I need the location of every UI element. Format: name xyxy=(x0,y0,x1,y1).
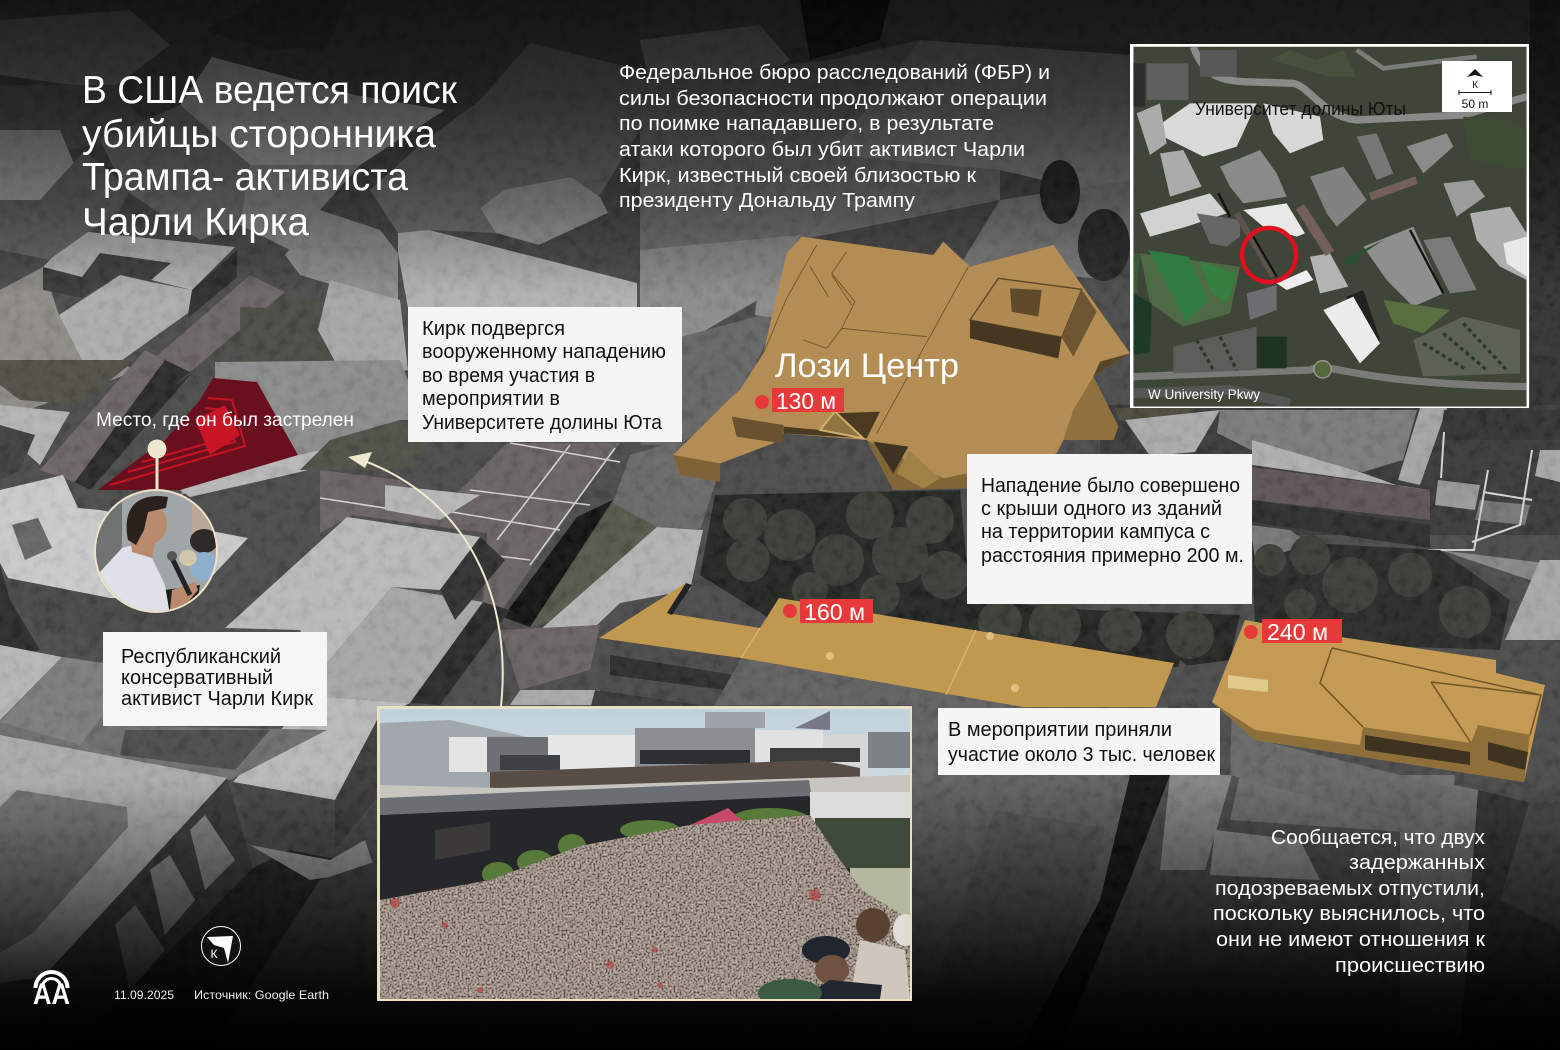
bottom shading xyxy=(0,780,1560,1050)
road label: W University Pkwy xyxy=(1148,387,1260,402)
text block: suspects released: подозреваемых отпустили, xyxy=(1215,878,1485,900)
event crowd photo xyxy=(377,706,917,1007)
east golden building xyxy=(1212,620,1545,782)
arrow from photo to site xyxy=(348,452,503,706)
callout: attack at the event: мероприятии в xyxy=(422,388,560,410)
callout: attack at the event: Университете долины Юта xyxy=(422,412,663,434)
title xyxy=(82,69,458,244)
tent xyxy=(690,808,742,825)
scale and north arrow: К xyxy=(1472,80,1478,91)
callout: attack at the event: во время участия в xyxy=(422,365,595,387)
callout: rooftop attack xyxy=(967,454,1252,604)
plaza around the site xyxy=(180,360,440,497)
top centre buildings xyxy=(640,0,1560,445)
lower centre and right roofs xyxy=(597,638,1560,1050)
foreground spectators xyxy=(758,908,910,999)
callout: Charlie Kirk caption xyxy=(103,632,327,726)
Anadolu agency logo: AA xyxy=(33,978,70,1011)
map imagery xyxy=(1133,47,1527,407)
callout: rooftop attack: с крыши одного из зданий xyxy=(981,498,1222,520)
trees xyxy=(700,490,1510,690)
Kirk's white building xyxy=(0,475,262,660)
tiled walkway left xyxy=(0,275,408,490)
callout: rooftop attack: на территории кампуса с xyxy=(981,521,1210,543)
portrait of Charlie Kirk xyxy=(90,485,220,615)
balcony crowd xyxy=(490,760,860,790)
shooting site red marker xyxy=(98,378,298,490)
text block: suspects released xyxy=(1213,827,1485,977)
inset satellite map xyxy=(1130,44,1529,408)
T-shaped roof xyxy=(0,232,237,420)
right campus and parking xyxy=(1100,405,1560,640)
distance tag 130 m xyxy=(755,388,844,414)
lower right building xyxy=(810,792,910,920)
title: Чарли Кирка xyxy=(82,201,310,244)
south golden building xyxy=(599,583,1174,707)
callout: Charlie Kirk caption: консервативный xyxy=(121,667,273,689)
date: 11.09.2025 xyxy=(114,988,174,1002)
title: Трампа- активиста xyxy=(82,156,409,199)
intro text block: атаки которого был убит активист Чарли xyxy=(619,138,1025,161)
callout: attack at the event: Кирк подвергся xyxy=(422,318,565,340)
Lozi Center label: Лози Центр xyxy=(775,347,959,385)
intro text block: Кирк, известный своей близостью к xyxy=(619,164,977,187)
mountains xyxy=(380,720,526,788)
university label: Университет долины Юты xyxy=(1195,99,1406,119)
lower-left big building xyxy=(0,645,380,1050)
intro text block xyxy=(619,61,1050,212)
text block: suspects released: происшествию xyxy=(1335,955,1485,977)
scale and north arrow: 50 m xyxy=(1462,97,1488,111)
callout: attendance: В мероприятии приняли xyxy=(948,719,1172,741)
text block: suspects released: задержанных xyxy=(1349,852,1485,874)
distance tag 160 m xyxy=(783,599,873,625)
intro text block: по поимке нападавшего, в результате xyxy=(619,112,994,135)
distance tag 240 m: 240 м xyxy=(1267,619,1328,645)
intro text block: Федеральное бюро расследований (ФБР) и xyxy=(619,61,1050,84)
title: убийцы сторонника xyxy=(82,113,437,156)
callout: Charlie Kirk caption: активист Чарли Кирк xyxy=(121,688,313,710)
callout: attendance xyxy=(938,708,1220,775)
title: В США ведется поиск xyxy=(82,69,458,112)
Lozi Center golden building xyxy=(673,237,1130,490)
scale and north arrow xyxy=(1442,61,1512,112)
distance tag 160 m: 160 м xyxy=(804,599,865,625)
callout: rooftop attack: расстояния примерно 200 м. xyxy=(981,545,1244,567)
central tile plaza xyxy=(320,440,720,690)
crowd xyxy=(380,810,910,1000)
top shading xyxy=(0,0,1560,295)
callout: Charlie Kirk caption: Республиканский xyxy=(121,646,281,668)
upper-left buildings xyxy=(0,0,640,308)
photo marker pin xyxy=(148,440,166,490)
distance tag 240 m xyxy=(1244,619,1342,645)
compass icon xyxy=(202,926,240,966)
intro text block: силы безопасности продолжают операции xyxy=(619,87,1047,110)
callout: attendance: участие около 3 тыс. человек xyxy=(948,744,1215,766)
text block: suspects released: поскольку выяснилось, что xyxy=(1213,903,1485,925)
distance tag 130 m: 130 м xyxy=(776,388,836,414)
text block: suspects released: они не имеют отношения к xyxy=(1216,929,1485,951)
concrete facade xyxy=(380,780,812,815)
callout: attack at the event xyxy=(408,307,682,442)
callout: rooftop attack: Нападение было совершено xyxy=(981,475,1240,497)
light roofs centre-left xyxy=(225,517,700,850)
callout: attack at the event: вооруженному нападению xyxy=(422,341,666,363)
map location circle xyxy=(1242,228,1296,282)
intro text block: президенту Дональду Трампу xyxy=(619,189,916,212)
bushes xyxy=(482,808,810,886)
source: Источник: Google Earth xyxy=(194,988,329,1002)
compass icon: К xyxy=(210,947,218,961)
site label: Место, где он был застрелен xyxy=(96,409,354,431)
text block: suspects released: Сообщается, что двух xyxy=(1271,827,1485,849)
upper building xyxy=(449,711,910,775)
